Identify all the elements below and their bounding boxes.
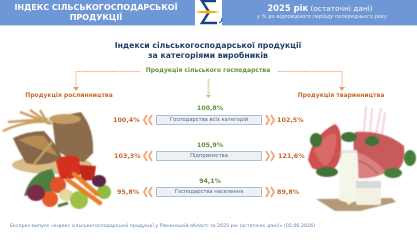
main heading: за категоріями виробників [148, 51, 268, 60]
header year: 2025 рік (остаточні дані) [267, 3, 373, 13]
category box [156, 115, 262, 125]
crops label: Продукція рослинництва [25, 92, 113, 99]
arrow: to livestock [278, 72, 345, 91]
header subtitle: у % до відповідного періоду попереднього року [257, 14, 387, 20]
header band: right [222, 0, 417, 26]
value: total: 94,1% [199, 178, 221, 185]
value: livestock: 121,6% [278, 152, 305, 160]
value: crops: 103,3% [114, 152, 141, 160]
category box: Господарства населення [175, 189, 243, 195]
value: total: 100,8% [197, 105, 223, 112]
header title: ПРОДУКЦІЇ [70, 13, 122, 22]
category box [156, 187, 262, 197]
row: enterprises [114, 142, 305, 161]
arrow: to crops [73, 72, 140, 91]
header band: left [0, 0, 195, 26]
main heading: Індекси сільськогосподарської продукції [115, 41, 301, 50]
arrow: to categories [206, 79, 211, 98]
header title [14, 2, 178, 22]
value: livestock: 102,5% [277, 116, 304, 124]
green subheading: Продукція сільського господарства [146, 67, 270, 74]
category box [156, 151, 262, 161]
main heading [115, 41, 302, 60]
image: meat and milk [308, 106, 416, 211]
footer source note: Експрес-випуск «Індекс сільськогосподарської продукції у Рівненській області за 2025 рік (остаточні дані)» (02.06.2026) [10, 224, 315, 229]
category box: Господарства всіх категорій [170, 117, 248, 123]
livestock label: Продукція тваринництва [298, 92, 384, 99]
value: total: 105,9% [197, 142, 223, 149]
value: livestock: 89,8% [277, 188, 299, 196]
category box: Підприємства [190, 153, 228, 159]
row: households [117, 178, 299, 197]
header title: ІНДЕКС СІЛЬСЬКОГОСПОДАРСЬКОЇ [14, 3, 178, 12]
value: crops: 95,8% [117, 188, 139, 196]
row: all categories [113, 105, 304, 125]
value: crops: 100,4% [113, 116, 140, 124]
